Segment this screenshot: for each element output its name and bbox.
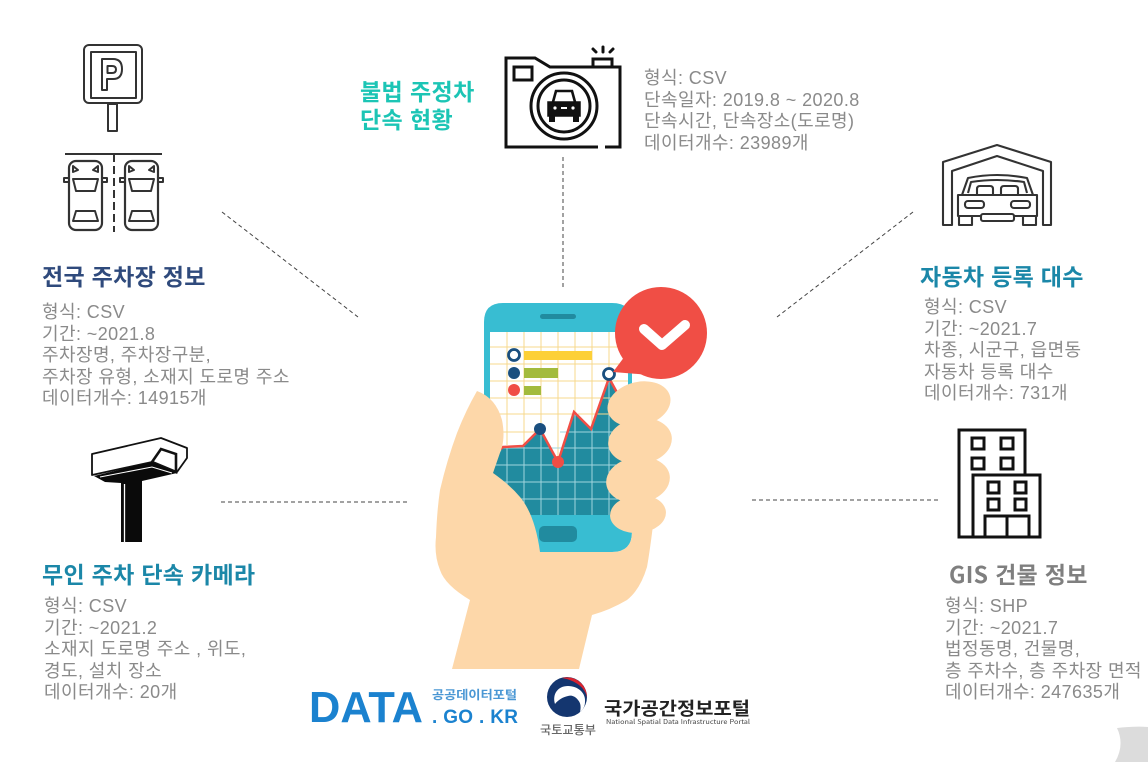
screen grid	[490, 332, 628, 460]
corner decoration	[1115, 727, 1148, 762]
icon: garage with car	[943, 145, 1051, 225]
text: GIS building details: 기간: ~2021.7	[945, 618, 1058, 638]
icon: camera with car	[506, 47, 620, 147]
text: vehicle registration details: 차종, 시군구, 읍면동	[924, 340, 1082, 360]
heading: unmanned parking cameras: 무인 주차 단속 카메라	[42, 556, 255, 590]
chart legend	[508, 350, 592, 396]
dashed connectors	[221, 157, 940, 502]
text: GIS building details: 형식: SHP	[945, 596, 1028, 616]
heading: illegal parking enforcement: 불법 주정차	[360, 73, 475, 107]
text: national parking lot details	[42, 302, 290, 408]
text: vehicle registration details: 기간: ~2021.7	[924, 318, 1037, 338]
logo: national spatial data portal: National Spatial Data Infrastructure Portal	[606, 716, 750, 726]
text: national parking lot details: 주차장명, 주차장구분,	[42, 345, 211, 365]
icon: parking sign and cars	[64, 45, 163, 232]
text: national parking lot details: 데이터개수: 14915개	[42, 388, 207, 408]
text: illegal parking enforcement details: 단속시간, 단속장소(도로명)	[644, 111, 854, 131]
text: vehicle registration details: 데이터개수: 731개	[924, 383, 1068, 403]
logo: data.go.kr: 공공데이터포털	[432, 686, 517, 703]
text: vehicle registration details: 형식: CSV	[924, 297, 1007, 317]
logo: ministry emblem: 국토교통부	[540, 721, 596, 738]
logo: data.go.kr	[309, 683, 518, 732]
text: GIS building details: 데이터개수: 247635개	[945, 682, 1120, 702]
text: vehicle registration details: 자동차 등록 대수	[924, 362, 1054, 382]
text: GIS building details	[945, 596, 1142, 702]
phone speaker and home button	[539, 314, 577, 542]
heading: vehicle registrations: 자동차 등록 대수	[920, 258, 1084, 292]
heading: GIS building information: GIS 건물 정보	[949, 556, 1088, 590]
text: unmanned parking camera details: 경도, 설치 장소	[44, 660, 162, 680]
text: illegal parking enforcement details: 단속일자: 2019.8 ~ 2020.8	[644, 90, 860, 110]
text: unmanned parking camera details	[44, 596, 246, 702]
line chart area	[490, 378, 628, 515]
speech bubble with check mark	[613, 287, 707, 379]
chart grid lines	[490, 380, 628, 515]
text: unmanned parking camera details: 소재지 도로명 주소 , 위도,	[44, 639, 246, 659]
text: national parking lot details: 주차장 유형, 소재지 도로명 주소	[42, 366, 290, 386]
fingers	[603, 375, 675, 535]
icon: buildings	[959, 430, 1040, 537]
text: GIS building details: 층 주차수, 층 주차장 면적	[945, 660, 1142, 680]
phone body	[484, 303, 632, 552]
text: vehicle registration details	[924, 297, 1082, 403]
heading: illegal parking enforcement	[360, 73, 475, 135]
text: national parking lot details: 기간: ~2021.8	[42, 324, 155, 344]
illustration: hand holding phone	[436, 287, 707, 669]
chart markers	[534, 368, 614, 468]
heading: national parking lots: 전국 주차장 정보	[42, 258, 206, 292]
logo: data.go.kr: DATA	[309, 683, 423, 732]
logo: data.go.kr: . GO . KR	[432, 707, 518, 728]
logo: ministry emblem	[540, 677, 596, 738]
text: unmanned parking camera details: 기간: ~2021.2	[44, 618, 157, 638]
text: GIS building details: 법정동명, 건물명,	[945, 639, 1080, 659]
text: illegal parking enforcement details: 데이터개수: 23989개	[644, 132, 809, 152]
text: unmanned parking camera details: 형식: CSV	[44, 596, 127, 616]
text: national parking lot details: 형식: CSV	[42, 302, 125, 322]
hand	[436, 391, 653, 669]
text: unmanned parking camera details: 데이터개수: 20개	[44, 682, 178, 702]
text: illegal parking enforcement details: 형식: CSV	[644, 68, 727, 88]
chart line	[497, 378, 620, 462]
logo: national spatial data portal: 국가공간정보포털	[604, 695, 750, 721]
text: illegal parking enforcement details	[644, 68, 860, 152]
heading: illegal parking enforcement: 단속 현황	[360, 101, 453, 135]
phone screen	[490, 332, 628, 515]
icon: enforcement camera	[92, 438, 187, 542]
